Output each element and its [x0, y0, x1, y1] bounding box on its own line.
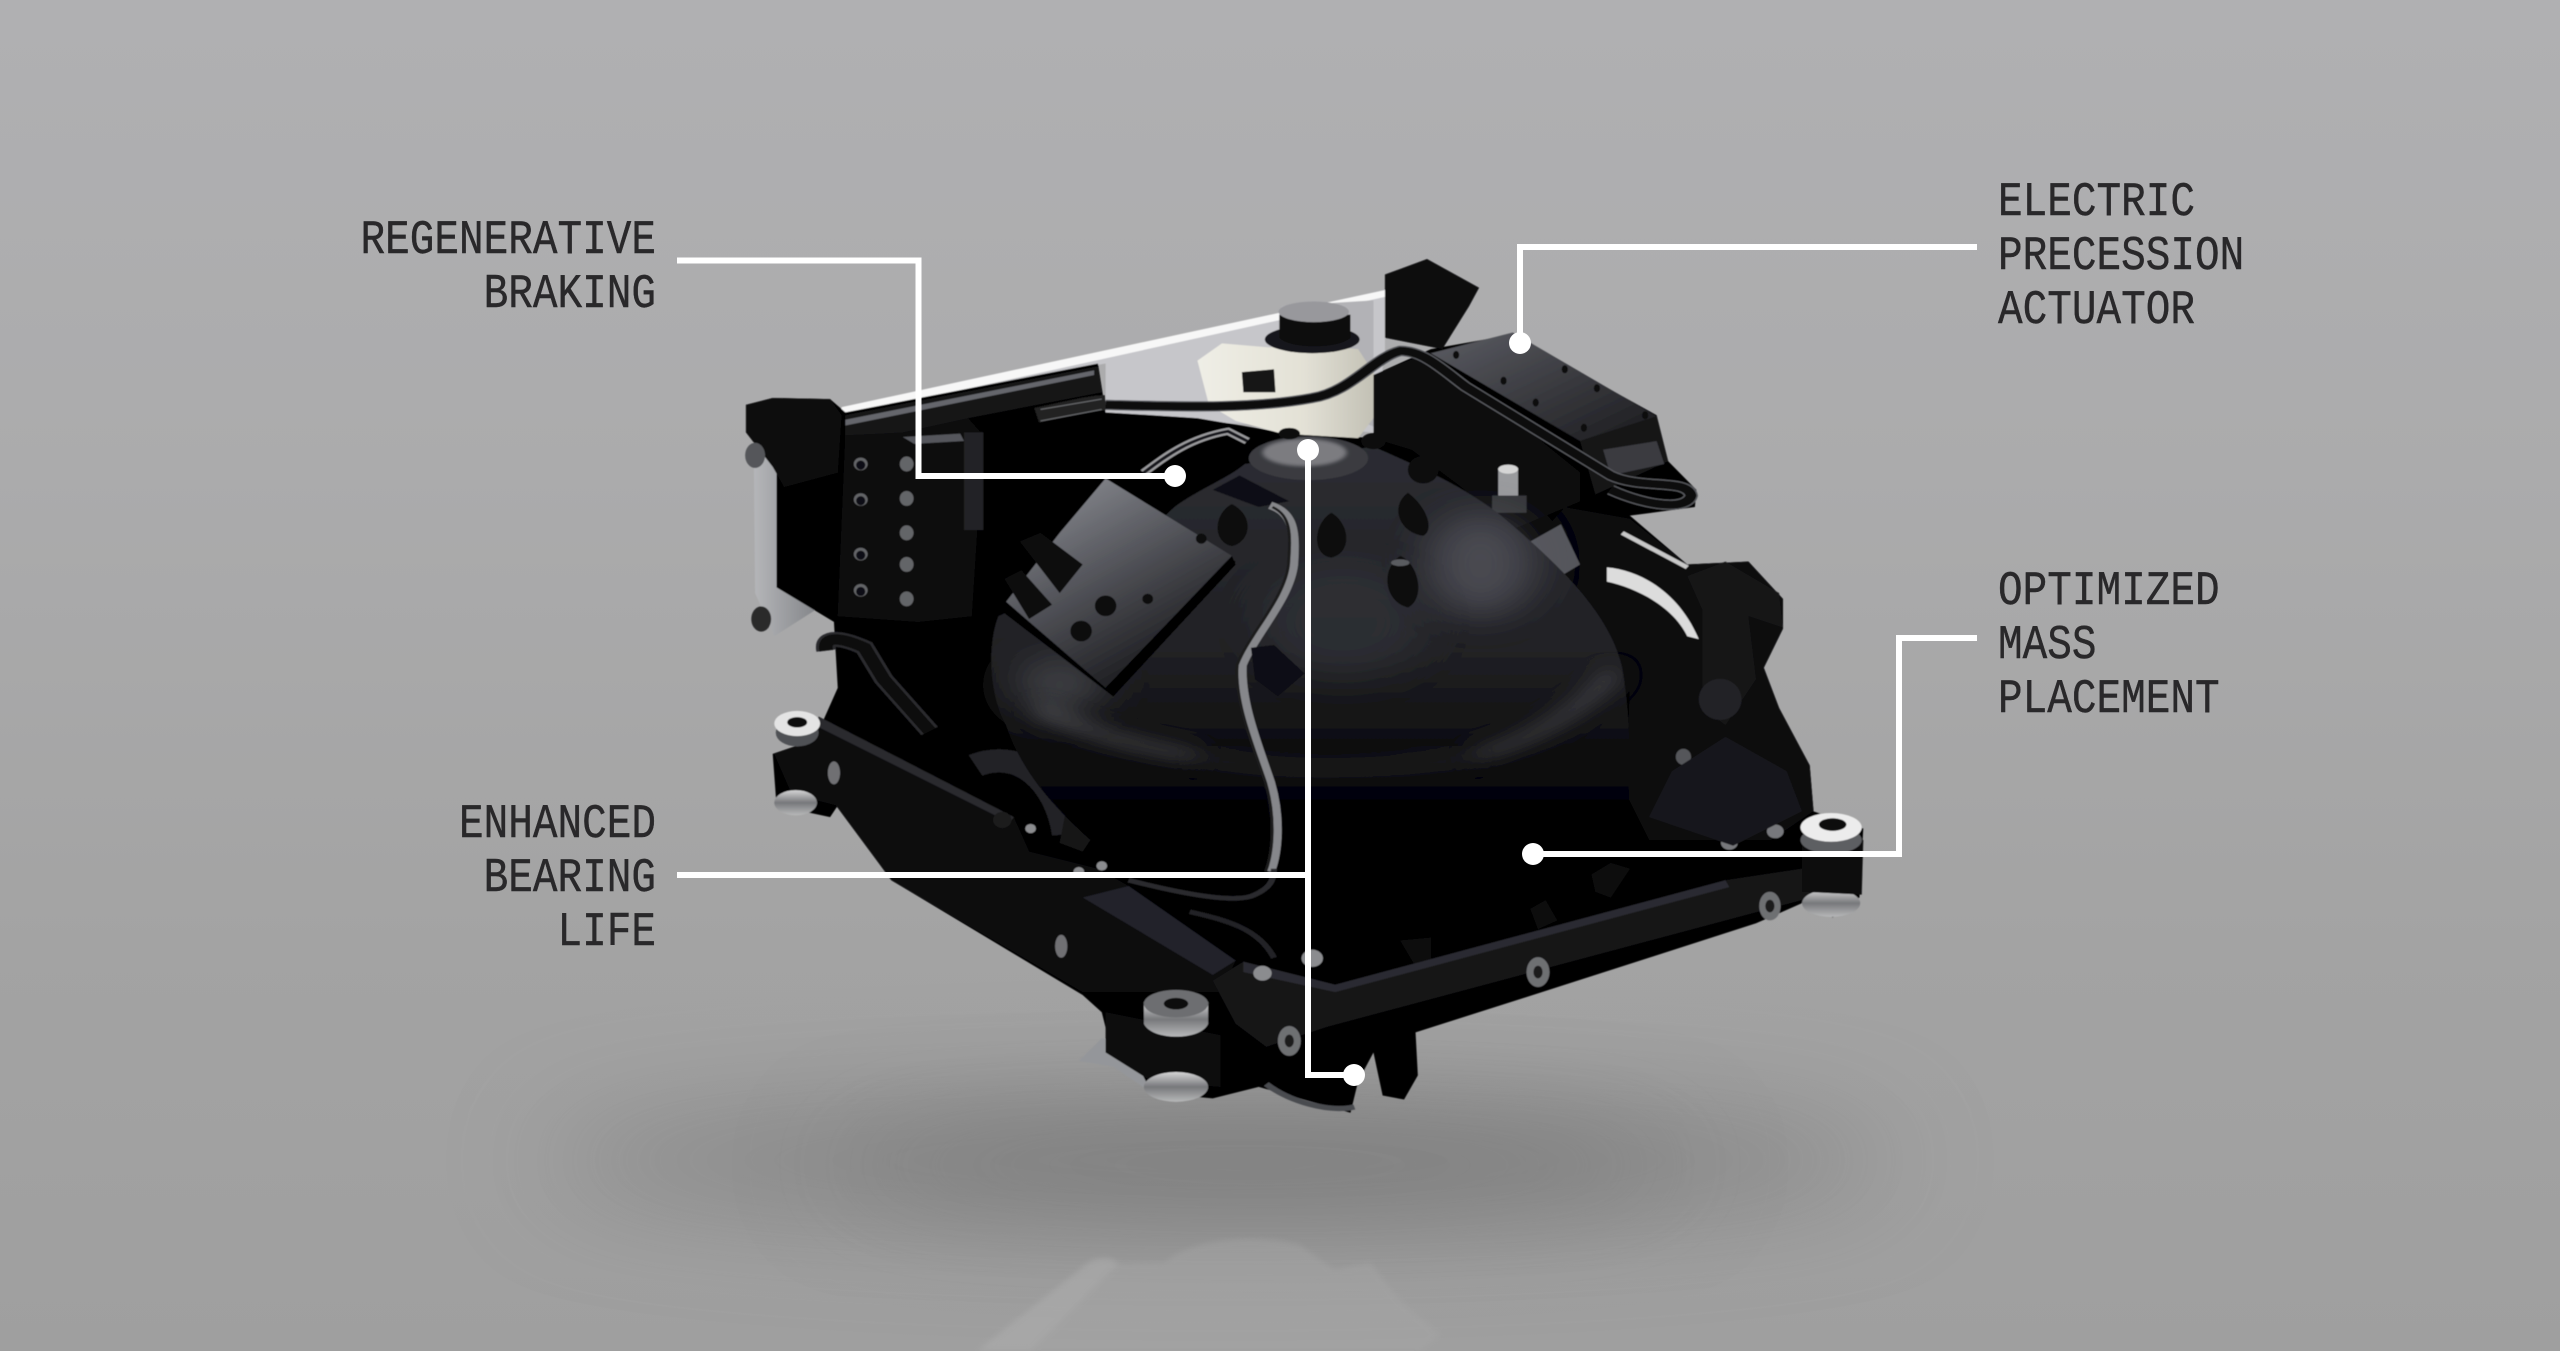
metal coolant pipes: [1129, 431, 1305, 958]
label text: BRAKING: [484, 268, 656, 322]
right mechanism: [1492, 465, 1814, 850]
front frame beam: [1213, 869, 1811, 1108]
leader line: [1533, 638, 1977, 854]
top bracket: [1385, 259, 1479, 349]
control box: [997, 478, 1236, 697]
leader line: [677, 260, 1175, 476]
back panel: [842, 290, 1385, 432]
label text: [361, 214, 656, 322]
coolant reservoir: [1197, 302, 1375, 438]
rubber mounts: [774, 711, 1863, 1102]
label text: ENHANCED: [459, 798, 656, 852]
top marker dot: [1297, 439, 1319, 461]
label text: REGENERATIVE: [361, 214, 656, 268]
dome highlights: [1014, 513, 1615, 770]
machine silhouette: [746, 335, 1863, 1113]
actuator wall: [1373, 352, 1580, 530]
callout: optimized mass placement: [1522, 565, 2220, 865]
electric precession actuator housing: [1431, 333, 1668, 494]
label text: LIFE: [558, 906, 656, 960]
mount: right: [1801, 813, 1863, 917]
label text: ELECTRIC: [1998, 176, 2195, 230]
callout: electric precession actuator: [1509, 176, 2244, 354]
label text: PRECESSION: [1998, 230, 2244, 284]
label text: MASS: [1998, 619, 2096, 673]
left valve block: [745, 366, 1106, 731]
dome rim fittings: [1400, 863, 1630, 966]
mount: left: [774, 711, 838, 815]
gyroscope machine illustration: [745, 259, 1863, 1113]
lower left frame: [811, 717, 1236, 992]
marker dot: [1522, 843, 1544, 865]
black coolant hose: [1106, 351, 1691, 505]
label text: ACTUATOR: [1998, 284, 2195, 338]
marker dot: [1509, 332, 1531, 354]
marker dot: [1164, 465, 1186, 487]
leader lines: [677, 450, 1354, 1075]
mount: front: [1079, 990, 1220, 1102]
callout: enhanced bearing life: [459, 439, 1365, 1086]
dome housing: [991, 428, 1630, 984]
label text: [1998, 565, 2220, 727]
floor shadow: [540, 1100, 1900, 1220]
label text: [1998, 176, 2244, 338]
label text: PLACEMENT: [1998, 673, 2220, 727]
floor reflection: [977, 1239, 1441, 1351]
silver mounting plate: [754, 432, 815, 636]
leader line: [1520, 247, 1977, 343]
label text: OPTIMIZED: [1998, 565, 2220, 619]
callout: regenerative braking: [361, 214, 1186, 487]
bottom marker dot: [1343, 1064, 1365, 1086]
label text: [459, 798, 656, 960]
label text: BEARING: [484, 852, 656, 906]
